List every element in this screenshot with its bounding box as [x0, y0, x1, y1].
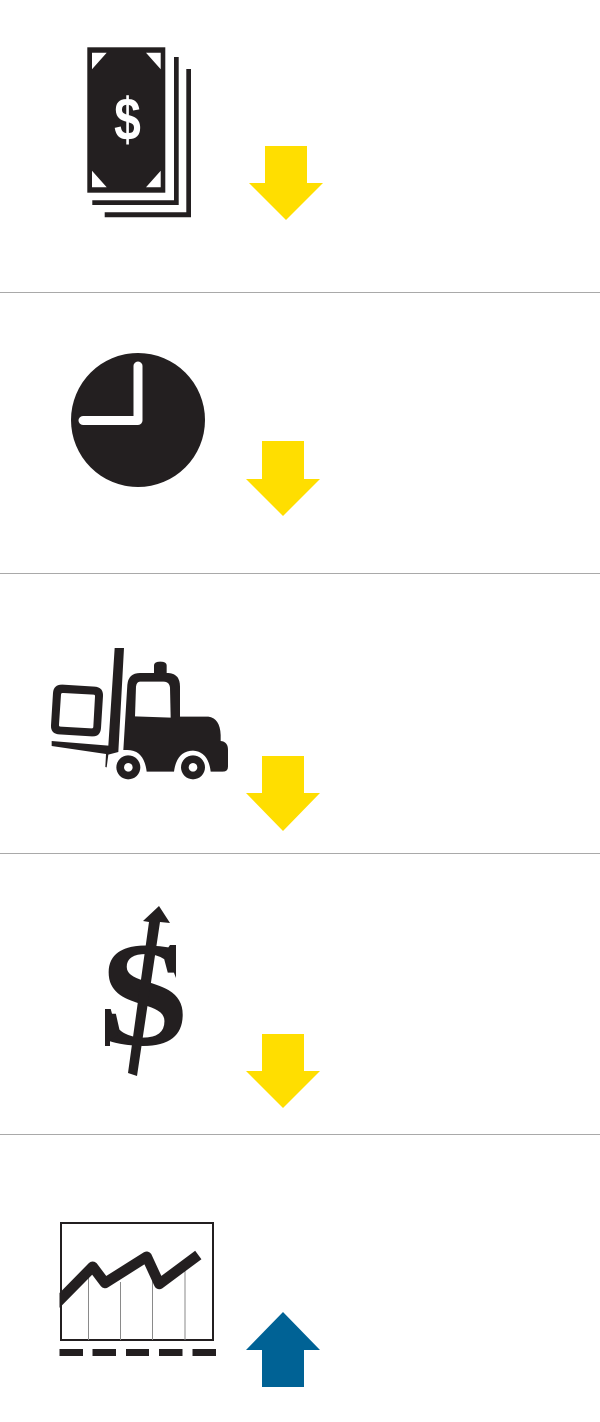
arrow: down yellow 4 [246, 1034, 320, 1108]
arrow: up blue [246, 1312, 320, 1387]
icon: clock [71, 353, 205, 487]
icon: forklift [51, 648, 228, 779]
arrow: down yellow 3 [246, 756, 320, 831]
icon: line chart [56, 1223, 216, 1356]
icon: dollar sign with up arrow: S [100, 913, 189, 1077]
arrow: down yellow 1 [249, 146, 323, 220]
arrow: down yellow 2 [246, 441, 320, 516]
icon: stack of money: $ [114, 86, 141, 153]
icon: stack of money [87, 47, 191, 217]
